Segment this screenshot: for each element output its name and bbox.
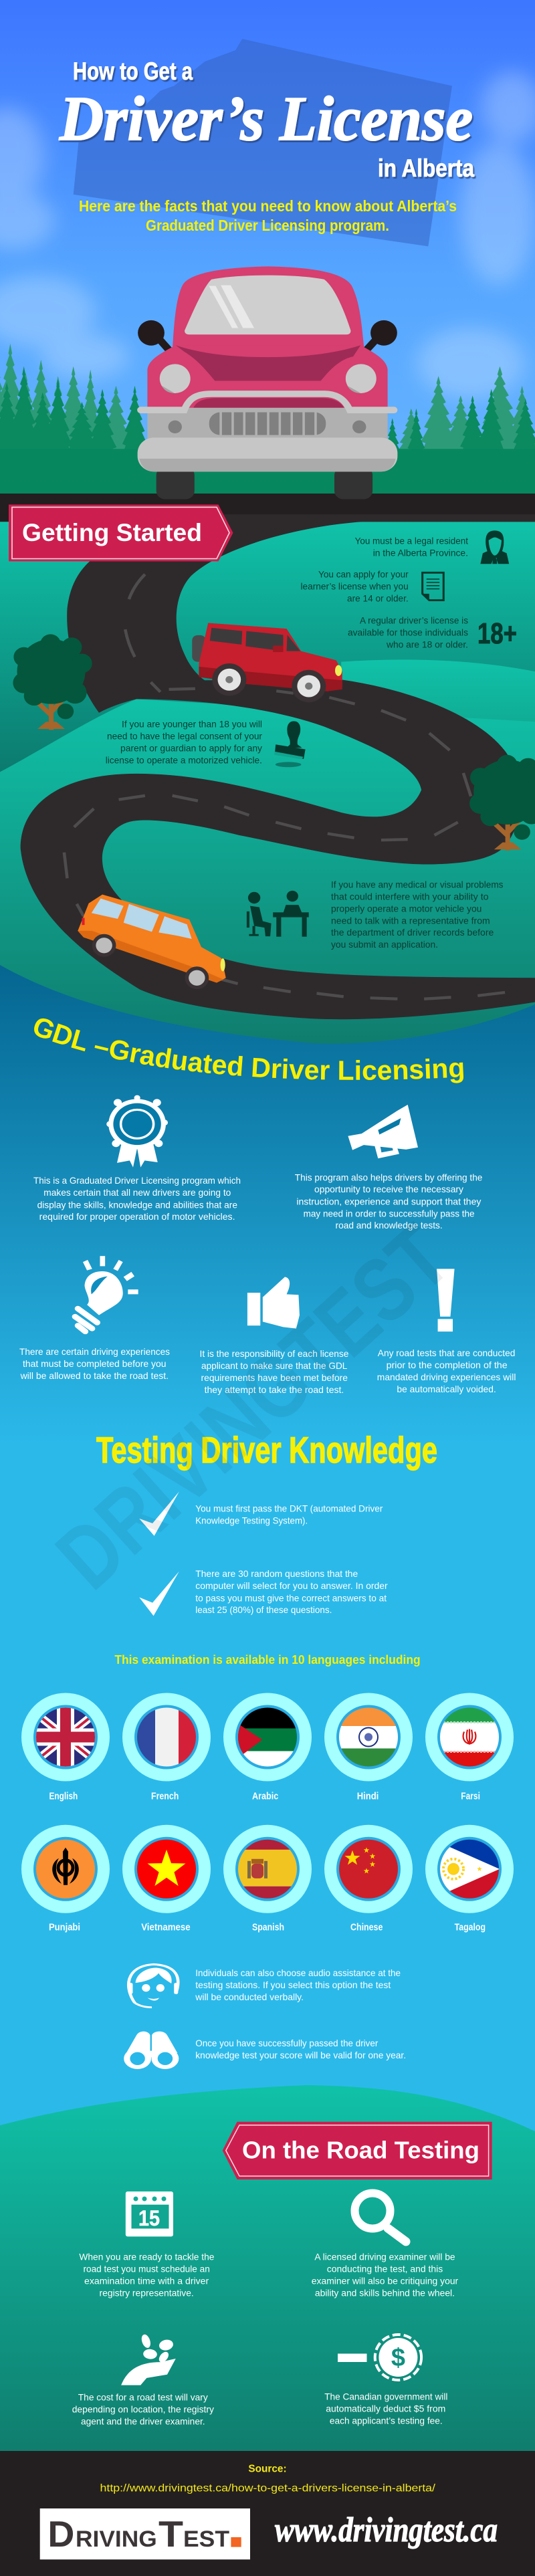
- heading: languages: This examination is available in 10 languages including: [114, 1653, 421, 1667]
- text: program help: This program also helps drivers by offering the: [295, 1172, 483, 1182]
- illustration: orange van: [78, 895, 226, 989]
- text: requirements: who are 18 or older.: [386, 639, 468, 649]
- text: audio assistance: testing stations. If you select this option the test: [195, 1979, 391, 1990]
- text: consent: [106, 718, 262, 765]
- text: examiner: ability and skills behind the wheel.: [315, 2287, 455, 2298]
- text: 30 questions: [195, 1568, 388, 1615]
- shape: Alberta province silhouette: [74, 39, 452, 246]
- flag: Vietnamese: [122, 1825, 211, 1913]
- source: [100, 2464, 436, 2494]
- text: medical note: [331, 879, 503, 950]
- logo: Driving Test: RIVING: [76, 2527, 157, 2552]
- text: audio assistance: [195, 1967, 401, 2002]
- text: applicant responsibility: [199, 1348, 349, 1395]
- text: cost: depending on location, the registry: [72, 2403, 214, 2414]
- text: GDL program: display the skills, knowledge and abilities that are: [37, 1199, 237, 1210]
- text: program help: instruction, experience and support that they: [296, 1196, 481, 1206]
- title: How to Get a Driver's License in Alberta: [59, 58, 474, 182]
- icon: person in suit: [480, 530, 509, 564]
- text: consent: If you are younger than 18 you will: [122, 718, 262, 729]
- sign: Getting Started: Getting Started: [22, 519, 202, 546]
- text: cost: [72, 2391, 214, 2426]
- text: score validity: [195, 2038, 406, 2060]
- logo: Driving Test: D: [47, 2513, 74, 2555]
- flag: Farsi: [425, 1693, 514, 1782]
- text: driving experiences: that must be completed before you: [23, 1358, 166, 1369]
- text: requirements: A regular driver’s license is: [360, 615, 468, 625]
- text: DKT: You must first pass the DKT (automated Driver: [195, 1503, 383, 1513]
- icon: interview at a desk: [247, 891, 309, 937]
- title: How to Get a Driver's License in Alberta: in Alberta: [378, 154, 474, 182]
- text: GDL program: makes certain that all new drivers are going to: [43, 1187, 231, 1198]
- icon: headset assistant: [128, 1964, 178, 2008]
- flag: Hindi: [324, 1693, 413, 1782]
- text: examiner: [312, 2251, 459, 2298]
- flag: Spanish: [223, 1825, 312, 1913]
- icon: megaphone: [348, 1105, 418, 1158]
- text: audio assistance: Individuals can also choose audio assistance at the: [195, 1967, 401, 1978]
- text: medical note: properly operate a motor vehicle you: [331, 903, 481, 914]
- text: medical note: If you have any medical or visual problems: [331, 879, 503, 889]
- panel: getting started winding road landscape: [0, 514, 535, 1044]
- source: http://www.drivingtest.ca/how-to-get-a-drivers-license-in-alberta/: [100, 2482, 436, 2494]
- text: examiner: A licensed driving examiner will be: [314, 2251, 455, 2262]
- text: program help: may need in order to successfully pass the: [304, 1208, 475, 1218]
- text: consent: license to operate a motorized vehicle.: [106, 754, 262, 765]
- icon: award ribbon: [106, 1095, 168, 1168]
- text: GDL program: required for proper operation of motor vehicles.: [39, 1211, 235, 1222]
- icon: minus five dollars: [338, 2335, 421, 2380]
- icon: 18+: 18+: [477, 617, 517, 650]
- text: score validity: Once you have successfully passed the driver: [195, 2038, 379, 2048]
- language labels: [49, 1790, 486, 1933]
- text: requirements: learner’s license when you: [301, 580, 409, 591]
- text: cost: agent and the driver examiner.: [81, 2416, 205, 2426]
- text: schedule road test: examination time with a driver: [84, 2275, 209, 2286]
- text: 30 questions: to pass you must give the correct answers to at: [195, 1592, 387, 1603]
- icon: thumbs up: [247, 1277, 300, 1329]
- icon: calendar: [126, 2191, 173, 2236]
- text: deduction: The Canadian government will: [324, 2391, 447, 2401]
- text: requirements: [301, 536, 468, 649]
- text: driving experiences: [19, 1346, 170, 1381]
- text: schedule road test: [79, 2251, 215, 2298]
- text: medical note: need to talk with a representative from: [331, 915, 490, 926]
- panel: footer: [0, 2451, 535, 2576]
- text: schedule road test: registry representative.: [99, 2287, 194, 2298]
- forest treeline: [0, 344, 535, 494]
- logo: Driving Test: EST: [183, 2527, 229, 2552]
- subtitle: [79, 197, 457, 234]
- sign: On the Road Testing: On the Road Testing: [242, 2136, 479, 2163]
- icon: exclamation mark: [437, 1269, 455, 1331]
- sign: Getting Started: [9, 504, 233, 561]
- text: cost: The cost for a road test will vary: [78, 2391, 208, 2402]
- icon: document: [423, 572, 443, 601]
- text: examiner: conducting the test, and this: [327, 2263, 443, 2274]
- heading: GDL curved title: GDL –Graduated Driver Licensing: [34, 1018, 463, 1083]
- text: requirements: in the Alberta Province.: [373, 548, 468, 558]
- text: applicant responsibility: they attempt to take the road test.: [205, 1384, 344, 1395]
- icon: stamp: [274, 721, 306, 767]
- text: 30 questions: computer will select for you to answer. In order: [195, 1580, 388, 1591]
- title: How to Get a Driver's License in Alberta: Driver’s License: [59, 84, 473, 154]
- text: deduction: each applicant’s testing fee.: [330, 2415, 443, 2426]
- text: deduction: automatically deduct $5 from: [326, 2403, 445, 2413]
- illustration: red jeep: [192, 623, 342, 702]
- text: voided road tests: prior to the completion of the: [387, 1360, 508, 1370]
- text: medical note: that could interfere with your ability to: [331, 891, 489, 901]
- text: requirements: You must be a legal resident: [355, 536, 468, 546]
- text: deduction: [324, 2391, 447, 2426]
- panel: blue knowledge background: [0, 956, 535, 2133]
- logo: Driving Test: T: [158, 2513, 183, 2555]
- flag: Tagalog: [425, 1825, 514, 1913]
- flag: Punjabi: [21, 1825, 110, 1913]
- text: applicant responsibility: requirements have been met before: [201, 1372, 348, 1383]
- text: schedule road test: road test you must schedule an: [83, 2263, 210, 2274]
- text: voided road tests: [377, 1348, 516, 1394]
- text: program help: [295, 1172, 483, 1230]
- text: 30 questions: least 25 (80%) of these questions.: [195, 1604, 332, 1615]
- text: examiner: examiner will also be critiquing your: [312, 2275, 459, 2286]
- language labels: Hindi: [357, 1790, 379, 1802]
- icon: hand with coins: [121, 2334, 176, 2385]
- language labels: French: [151, 1790, 179, 1802]
- language labels: Farsi: [461, 1790, 480, 1802]
- text: voided road tests: be automatically voided.: [397, 1384, 496, 1394]
- text: applicant responsibility: It is the responsibility of each license: [199, 1348, 349, 1359]
- text: driving experiences: There are certain driving experiences: [19, 1346, 170, 1357]
- text: consent: need to have the legal consent of your: [107, 730, 262, 741]
- logo: Driving Test: [40, 2508, 250, 2559]
- subtitle: Here are the facts that you need to know about Alberta’s: [79, 197, 457, 215]
- text: medical note: the department of driver records before: [331, 927, 494, 938]
- flag: Arabic: [223, 1693, 312, 1782]
- text: medical note: you submit an application.: [331, 939, 438, 950]
- flag: English: [21, 1693, 110, 1782]
- text: requirements: You can apply for your: [318, 569, 409, 580]
- icon: minus five dollars: $: [391, 2344, 405, 2372]
- language labels: Arabic: [252, 1790, 278, 1802]
- icon: check mark one: [139, 1492, 179, 1536]
- text: voided road tests: Any road tests that are conducted: [378, 1348, 515, 1358]
- language labels: Chinese: [350, 1922, 383, 1933]
- text: 30 questions: There are 30 random questions that the: [195, 1568, 358, 1579]
- text: consent: parent or guardian to apply for any: [120, 742, 262, 753]
- title: How to Get a Driver's License in Alberta: How to Get a: [73, 58, 193, 85]
- icon: binoculars: [126, 2032, 177, 2067]
- panel: sky header: [0, 0, 535, 508]
- source: Source:: [248, 2464, 287, 2475]
- flag: Chinese: [324, 1825, 413, 1913]
- text: program help: opportunity to receive the necessary: [314, 1184, 463, 1194]
- text: score validity: knowledge test your score will be valid for one year.: [195, 2050, 406, 2060]
- icon: magnifying glass: [354, 2193, 406, 2242]
- language labels: Spanish: [252, 1922, 284, 1933]
- illustration: trees: [13, 634, 535, 851]
- language labels: English: [49, 1790, 78, 1802]
- text: GDL program: This is a Graduated Driver Licensing program which: [33, 1175, 241, 1186]
- language labels: Punjabi: [49, 1922, 80, 1933]
- text: applicant responsibility: applicant to make sure that the GDL: [201, 1360, 348, 1371]
- text: program help: road and knowledge tests.: [336, 1220, 443, 1230]
- text: driving experiences: will be allowed to take the road test.: [20, 1370, 169, 1381]
- icon: check mark two: [139, 1572, 179, 1616]
- text: audio assistance: will be conducted verbally.: [195, 1992, 304, 2002]
- illustration: pink car front view: [138, 266, 397, 499]
- text: requirements: are 14 or older.: [347, 593, 409, 603]
- language labels: Vietnamese: [141, 1922, 191, 1933]
- text: requirements: available for those individuals: [348, 627, 468, 637]
- heading: Testing Driver Knowledge: Testing Driver Knowledge: [96, 1429, 437, 1471]
- text: GDL program: [33, 1175, 241, 1222]
- text: DKT: [195, 1503, 383, 1525]
- text: schedule road test: When you are ready to tackle the: [79, 2251, 215, 2262]
- text: voided road tests: mandated driving experiences will: [377, 1372, 516, 1382]
- text: DKT: Knowledge Testing System).: [195, 1515, 308, 1525]
- icon: light bulb: [75, 1256, 138, 1331]
- sign: On the Road Testing: [223, 2122, 492, 2179]
- icon: calendar: 15: [138, 2206, 160, 2230]
- subtitle: Graduated Driver Licensing program.: [146, 217, 389, 234]
- panel: on the road testing: [0, 2085, 535, 2452]
- flag: French: [122, 1693, 211, 1782]
- road band at top of section: [0, 494, 535, 523]
- language labels: Tagalog: [455, 1922, 486, 1933]
